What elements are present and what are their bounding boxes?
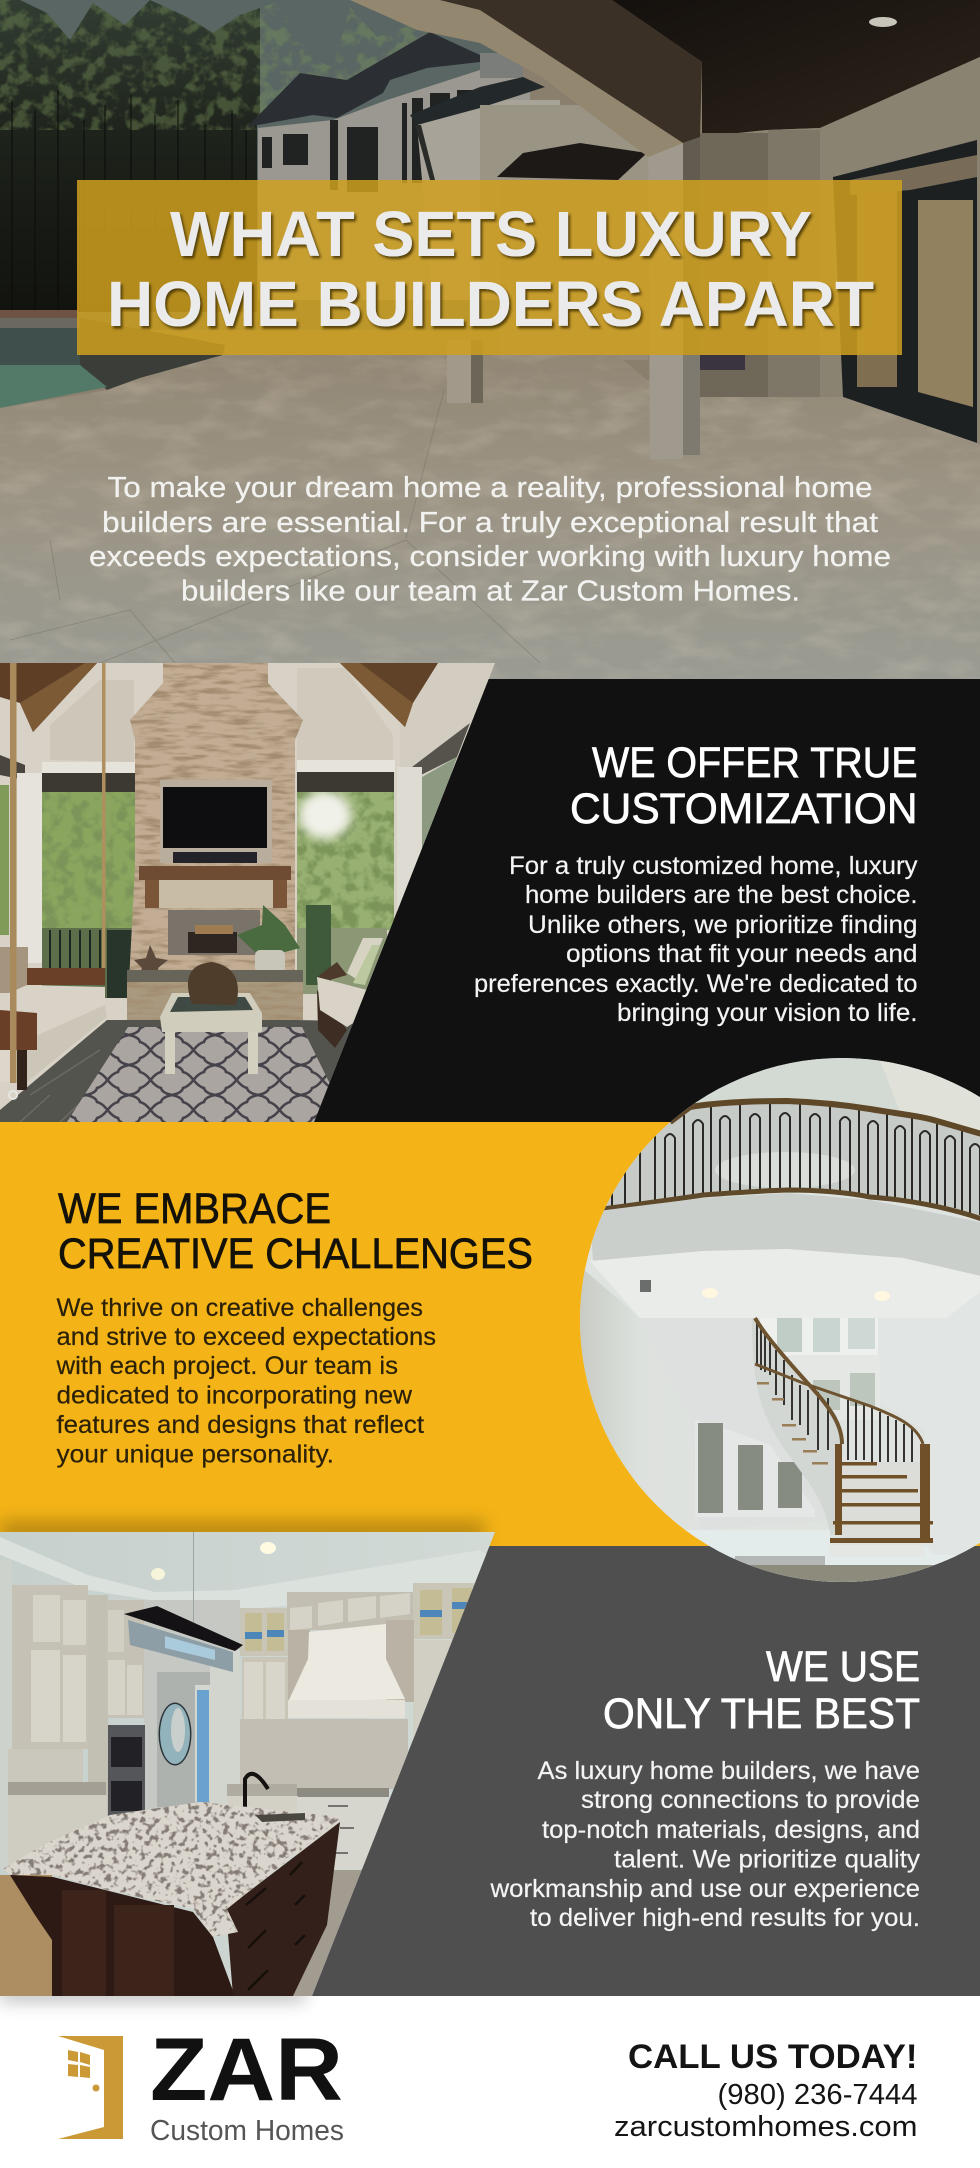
pediment and eave xyxy=(418,100,560,183)
body text: customization: home builders are the best choice. xyxy=(525,881,918,909)
potted plant xyxy=(237,905,300,952)
glass cabinets right xyxy=(413,1583,477,1740)
stone patio floor xyxy=(0,355,980,680)
section heading: creative challenges xyxy=(58,1185,533,1278)
intro paragraph xyxy=(89,472,891,608)
stone arch beam xyxy=(350,0,683,157)
photo: curved staircase in circle xyxy=(570,1050,980,1590)
glass doors xyxy=(833,140,977,443)
crystal chandelier xyxy=(124,1532,243,1672)
photo: kitchen with granite island xyxy=(0,1532,495,1996)
double ovens xyxy=(108,1725,145,1820)
middle wall xyxy=(88,1595,108,1825)
panel: grey materials background xyxy=(300,1546,980,1996)
shiplap ceiling left xyxy=(50,680,134,762)
backsplash xyxy=(240,1719,408,1789)
left upper cabinets xyxy=(12,1585,88,1749)
cabinet row above hood xyxy=(287,1592,415,1630)
fireplace surround xyxy=(159,880,273,908)
section heading: customization: WE OFFER TRUE xyxy=(592,739,918,787)
balcony railing xyxy=(603,1101,980,1220)
panel: hero background photo xyxy=(0,0,980,680)
hood niches xyxy=(288,1630,310,1702)
window headers xyxy=(42,773,135,792)
white pillars xyxy=(17,773,42,963)
shiplap ceiling right xyxy=(297,668,393,760)
slate floor xyxy=(0,1020,354,1122)
body text: creative challenges: features and designs that reflect xyxy=(56,1411,424,1439)
left wood floor xyxy=(0,1875,52,1996)
right window xyxy=(297,792,394,930)
blue door xyxy=(195,1685,210,1802)
title text: HOME BUILDERS APART xyxy=(107,268,874,340)
body text: customization: Unlike others, we prioritize finding xyxy=(528,911,918,939)
body text: only the best: to deliver high-end results for you. xyxy=(530,1904,920,1932)
body text: only the best: top-notch materials, designs, and xyxy=(542,1816,920,1844)
curved stair body xyxy=(752,1318,842,1535)
balcony soffit xyxy=(590,1193,980,1277)
body text: customization: preferences exactly. We're dedicated to xyxy=(474,970,918,998)
left counter and base xyxy=(8,1782,106,1795)
tall cabinets xyxy=(107,1600,144,1718)
title banner xyxy=(77,180,902,355)
round mirror xyxy=(158,1702,192,1766)
right wall xyxy=(738,57,980,133)
body text: creative challenges: We thrive on creative challenges xyxy=(56,1294,423,1322)
logo: Zar Custom Homes xyxy=(58,2019,344,2147)
coffee table xyxy=(160,962,262,1074)
crown moulding xyxy=(0,1537,495,1610)
lower windows xyxy=(695,1420,815,1517)
section heading: only the best xyxy=(603,1643,920,1738)
star ornament xyxy=(134,945,168,970)
upper windows xyxy=(760,1318,878,1356)
body text: customization: bringing your vision to life. xyxy=(617,999,918,1027)
tv screen xyxy=(163,787,267,848)
faucet xyxy=(245,1774,268,1812)
logo tagline: Custom Homes xyxy=(150,2115,344,2147)
entry wall xyxy=(480,105,648,180)
arch opening xyxy=(497,143,647,180)
contact block xyxy=(614,2038,918,2143)
section heading: only the best: WE USE xyxy=(766,1643,920,1691)
body text: only the best: As luxury home builders, we have xyxy=(538,1757,920,1785)
marble floor xyxy=(640,1530,980,1590)
icon: open door xyxy=(58,2036,123,2139)
dark wood ceiling xyxy=(612,0,980,137)
body text: only the best: workmanship and use our experience xyxy=(489,1875,920,1903)
house windows xyxy=(262,90,473,192)
left window xyxy=(42,792,135,930)
title text: WHAT SETS LUXURY xyxy=(170,198,812,270)
intro paragraph: builders like our team at Zar Custom Homes. xyxy=(181,576,800,608)
centre wall xyxy=(640,1318,840,1530)
near column xyxy=(648,143,683,459)
section heading: creative challenges: CREATIVE CHALLENGES xyxy=(58,1230,533,1278)
body text: customization: options that fit your needs and xyxy=(566,940,918,968)
phone number: (980) 236-7444 xyxy=(718,2079,918,2111)
section heading: creative challenges: WE EMBRACE xyxy=(58,1185,331,1233)
stair treads xyxy=(757,1382,933,1543)
body text: customization xyxy=(474,852,918,1027)
chimney xyxy=(130,663,303,970)
hearth xyxy=(127,970,303,982)
right sofa xyxy=(317,938,383,1048)
body text: customization: For a truly customized home, luxury xyxy=(509,852,918,880)
intro paragraph: To make your dream home a reality, professional home xyxy=(108,472,872,504)
section heading: customization xyxy=(570,739,918,833)
logo wordmark: ZAR xyxy=(150,2019,343,2119)
wood mantel xyxy=(139,866,291,880)
left wall xyxy=(575,1262,700,1560)
panel: black customization background xyxy=(300,679,980,1122)
right floor xyxy=(293,1870,400,1996)
pool water xyxy=(0,365,107,408)
wood ceiling right xyxy=(340,663,438,727)
banner background xyxy=(77,180,902,355)
rear counter xyxy=(227,1784,297,1796)
firebox xyxy=(168,910,260,955)
brown beam face xyxy=(440,0,702,143)
tv frame xyxy=(160,780,272,863)
wood ceiling left xyxy=(0,663,97,732)
intro paragraph: builders are essential. For a truly exceptional result that xyxy=(102,507,878,539)
far-right screen xyxy=(412,723,470,777)
left wall xyxy=(0,1560,12,1870)
call to action: CALL US TODAY! xyxy=(628,2038,918,2076)
stair balusters xyxy=(757,1322,912,1490)
body text: creative challenges: your unique personality. xyxy=(56,1440,334,1468)
section heading: customization: CUSTOMIZATION xyxy=(570,785,918,833)
glass cabinets centre xyxy=(240,1608,288,1750)
soundbar xyxy=(173,852,257,863)
stair handrails xyxy=(755,1318,842,1444)
body text: only the best: strong connections to provide xyxy=(581,1786,920,1814)
intro paragraph: exceeds expectations, consider working with luxury home xyxy=(89,541,891,573)
left backsplash xyxy=(8,1749,83,1784)
body text: only the best: talent. We prioritize quality xyxy=(614,1846,921,1874)
body text: creative challenges: and strive to exceed expectations xyxy=(56,1323,436,1351)
hanging swing daybed xyxy=(0,663,107,1099)
body text: creative challenges: dedicated to incorporating new xyxy=(56,1382,413,1410)
island base xyxy=(10,1875,235,1996)
right wall xyxy=(875,1288,980,1560)
mid windows xyxy=(790,1355,880,1420)
house walls xyxy=(258,70,530,300)
panel: yellow challenges background xyxy=(0,1122,980,1546)
body text: only the best xyxy=(489,1757,921,1932)
photo 3 drop shadows xyxy=(0,1522,485,2001)
title text xyxy=(107,198,874,340)
railings xyxy=(42,928,135,998)
pool wall xyxy=(0,310,78,318)
range hood xyxy=(288,1624,405,1718)
far column xyxy=(447,355,471,403)
photo: porch with fireplace xyxy=(0,663,495,1122)
granite island top xyxy=(3,1802,342,1937)
right base cabinets xyxy=(228,1796,387,1869)
ceiling lights xyxy=(260,1542,276,1554)
body text: creative challenges xyxy=(55,1294,436,1468)
ceiling xyxy=(590,1249,980,1318)
section heading: only the best: ONLY THE BEST xyxy=(603,1690,920,1738)
upper wall xyxy=(650,1050,980,1140)
house roof xyxy=(247,32,480,127)
website: zarcustomhomes.com xyxy=(614,2111,918,2143)
far right wall xyxy=(400,663,495,767)
patterned rug xyxy=(67,1027,333,1122)
body text: creative challenges: with each project. Our team is xyxy=(55,1352,398,1380)
